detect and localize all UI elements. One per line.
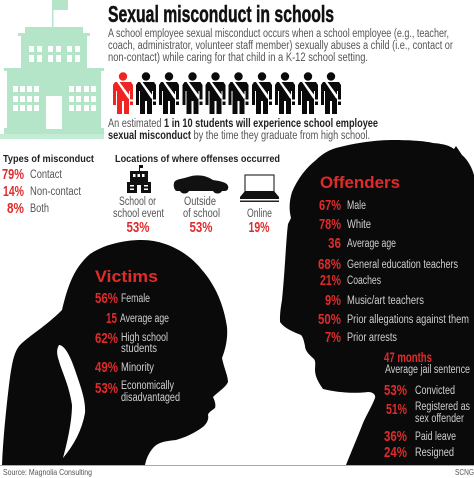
icon: laptop — [240, 175, 279, 202]
stat list: offender outcomes: 53% — [384, 383, 407, 399]
stat list: offender profile: 36 — [328, 236, 341, 252]
panel: types of misconduct: 8% — [7, 201, 24, 217]
panel: types of misconduct: Contact — [30, 169, 63, 181]
stat list: offender profile: 9% — [325, 293, 341, 309]
location: school or school event: school event — [113, 208, 165, 220]
panel: types of misconduct: Both — [30, 203, 49, 215]
location: outside of school: of school — [183, 208, 220, 220]
stat list: victims — [95, 291, 180, 404]
stat list: offender outcomes: 24% — [384, 445, 407, 461]
silhouette: offender head — [280, 140, 474, 465]
stat list: offender outcomes: 36% — [384, 429, 407, 445]
stat list: victims: Average age — [120, 313, 169, 325]
location: online — [247, 208, 272, 236]
stat list: victims: 56% — [95, 291, 118, 307]
stat list: offender outcomes: 51% — [386, 402, 407, 418]
stat list: offender profile: Prior arrests — [347, 332, 397, 344]
icon: school — [127, 165, 151, 193]
location: outside of school: 53% — [190, 220, 213, 236]
location: outside of school — [183, 196, 220, 236]
panel: types of misconduct: 14% — [3, 184, 24, 200]
panel: types of misconduct: Types of misconduct — [3, 153, 94, 165]
stat list: offender profile: 21% — [320, 273, 341, 289]
location: online: Online — [247, 208, 272, 220]
stat list: victims: 53% — [95, 381, 118, 397]
stat list: offender outcomes: 47 months — [384, 349, 432, 365]
source credit: Source: Magnolia Consulting — [3, 467, 92, 477]
icon: car — [174, 175, 228, 194]
stat list: victims: Minority — [121, 362, 154, 374]
stat list: offender profile: 67% — [319, 198, 341, 214]
stat list: offender profile — [318, 198, 469, 346]
panel: types of misconduct: Non-contact — [30, 186, 82, 198]
location: online: 19% — [248, 220, 270, 236]
stat list: victims: 15 — [106, 311, 117, 327]
text block: 1 in 10 statement: sexual misconduct by the time they graduate from high school. — [108, 130, 370, 142]
stat list: victims: disadvantaged — [121, 392, 180, 404]
stat list: victims: High school — [121, 332, 168, 344]
stat list: offender profile: Music/art teachers — [347, 295, 424, 307]
stat list: offender outcomes: Resigned — [415, 447, 454, 459]
icon: school building — [0, 0, 104, 139]
pictogram: 1 in 10 students — [113, 72, 342, 114]
location: school or school event — [113, 196, 165, 236]
stat list: offender profile: Coaches — [347, 275, 381, 287]
panel: types of misconduct: 79% — [2, 167, 24, 183]
panel: offenders — [318, 173, 470, 461]
text block: definition: non-contact) while caring for that child in a K-12 school setting. — [108, 52, 368, 64]
stat list: offender profile: 68% — [318, 257, 341, 273]
panel: types of misconduct — [2, 153, 94, 217]
stat list: offender outcomes: Paid leave — [415, 431, 456, 443]
stat list: victims: Economically — [121, 380, 174, 392]
panel: victims — [95, 267, 180, 404]
stat list: victims: students — [121, 343, 157, 355]
stat list: victims: 62% — [95, 331, 118, 347]
heading: victims: Victims — [95, 267, 158, 286]
silhouette: victim head — [2, 240, 228, 465]
stat list: offender outcomes — [384, 349, 470, 461]
stat list: offender outcomes: Convicted — [415, 385, 455, 397]
stat list: offender profile: White — [347, 219, 371, 231]
stat list: offender profile: 50% — [318, 312, 341, 328]
heading: offenders: Offenders — [320, 173, 400, 192]
title: Sexual misconduct in schools — [108, 1, 334, 27]
location: school or school event: 53% — [126, 220, 150, 236]
stat list: offender profile: 78% — [319, 217, 341, 233]
stat list: offender profile: Male — [347, 200, 366, 212]
text block: 1 in 10 statement: An estimated 1 in 10 students will experience school employee — [108, 118, 378, 130]
text block: 1 in 10 statement — [108, 118, 378, 142]
location: outside of school: Outside — [184, 196, 216, 208]
text block: definition — [108, 28, 453, 64]
stat list: offender profile: 7% — [325, 330, 341, 346]
heading: locations: Locations of where offenses occurred — [115, 153, 280, 165]
stat list: offender profile: Average age — [347, 238, 396, 250]
stat list: victims: Female — [121, 293, 150, 305]
stat list: victims: 49% — [95, 360, 118, 376]
location: school or school event: School or — [119, 196, 156, 208]
